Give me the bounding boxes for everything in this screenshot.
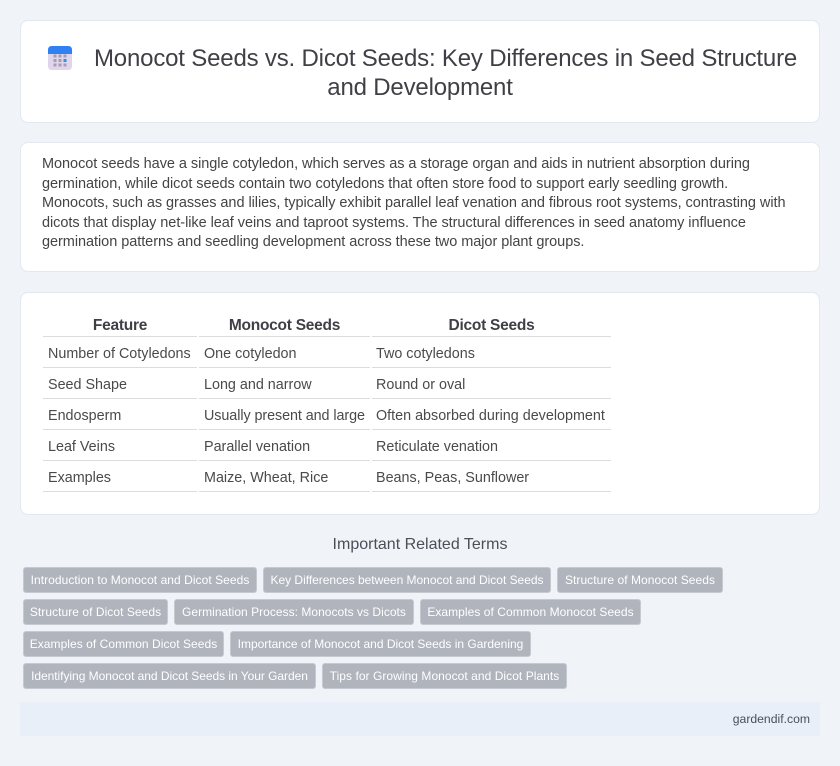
title: and Development <box>327 74 513 101</box>
related terms heading: Important Related Terms <box>333 536 507 553</box>
tag <box>23 663 316 689</box>
tag <box>23 631 224 657</box>
header panel <box>20 20 820 123</box>
tag: Structure of Monocot Seeds <box>565 573 715 587</box>
tag: Germination Process: Monocots vs Dicots <box>182 605 406 619</box>
row: examples: Examples <box>48 470 111 486</box>
tag: Introduction to Monocot and Dicot Seeds <box>31 573 249 587</box>
related terms tags <box>23 567 723 689</box>
intro text panel <box>20 142 820 272</box>
tag <box>23 599 168 625</box>
title <box>94 45 797 101</box>
row: number of cotyledons: Number of Cotyledons <box>48 346 191 362</box>
row: number of cotyledons: Two cotyledons <box>376 346 475 362</box>
intro paragraph: Monocots, such as grasses and lilies, typically exhibit parallel leaf venation and fibrous root systems, contrasting with <box>42 195 785 211</box>
row: seed shape: Seed Shape <box>48 377 127 393</box>
table header: Dicot Seeds <box>448 317 534 334</box>
row: endosperm: Often absorbed during development <box>376 408 605 424</box>
row: seed shape <box>43 377 611 399</box>
tag: Importance of Monocot and Dicot Seeds in Gardening <box>238 637 523 651</box>
tag: Key Differences between Monocot and Dicot Seeds <box>270 573 544 587</box>
row: seed shape: Round or oval <box>376 377 465 393</box>
tag <box>174 599 414 625</box>
table header <box>43 317 611 337</box>
row: seed shape: Long and narrow <box>204 377 312 393</box>
table header: Monocot Seeds <box>229 317 340 334</box>
row: examples: Beans, Peas, Sunflower <box>376 470 529 486</box>
tag <box>263 567 551 593</box>
row: number of cotyledons <box>43 346 611 368</box>
intro paragraph: Monocot seeds have a single cotyledon, which serves as a storage organ and aids in nutrient absorption during <box>42 156 750 172</box>
tag <box>322 663 567 689</box>
intro paragraph: dicots that display net-like leaf veins and taproot systems. The structural differences in seed anatomy influence <box>42 214 746 230</box>
row: leaf veins: Parallel venation <box>204 439 310 455</box>
intro paragraph <box>42 156 785 250</box>
intro paragraph: germination patterns and seedling development across these two major plant groups. <box>42 234 584 250</box>
table header: Feature <box>93 317 147 334</box>
row: examples: Maize, Wheat, Rice <box>204 470 328 486</box>
footer bar <box>20 702 820 736</box>
title: Monocot Seeds vs. Dicot Seeds: Key Differences in Seed Structure <box>94 45 797 72</box>
row: endosperm: Endosperm <box>48 408 121 424</box>
footer site name: gardendif.com <box>733 712 810 726</box>
tag <box>23 567 257 593</box>
tag <box>230 631 531 657</box>
row: endosperm <box>43 408 611 430</box>
tag: Examples of Common Dicot Seeds <box>30 637 217 651</box>
icon: calendar <box>48 46 72 70</box>
row: leaf veins: Leaf Veins <box>48 439 115 455</box>
row: endosperm: Usually present and large <box>204 408 365 424</box>
row: number of cotyledons: One cotyledon <box>204 346 296 362</box>
tag: Examples of Common Monocot Seeds <box>427 605 634 619</box>
table <box>43 317 611 492</box>
row: leaf veins: Reticulate venation <box>376 439 498 455</box>
tag: Identifying Monocot and Dicot Seeds in Your Garden <box>31 669 308 683</box>
tag: Tips for Growing Monocot and Dicot Plants <box>330 669 559 683</box>
intro paragraph: germination, while dicot seeds contain two cotyledons that often store food to support early seedling growth. <box>42 176 728 192</box>
row: leaf veins <box>43 439 611 461</box>
tag <box>420 599 641 625</box>
tag <box>557 567 723 593</box>
row: examples <box>43 470 611 492</box>
tag: Structure of Dicot Seeds <box>30 605 161 619</box>
comparison table panel <box>20 292 820 515</box>
